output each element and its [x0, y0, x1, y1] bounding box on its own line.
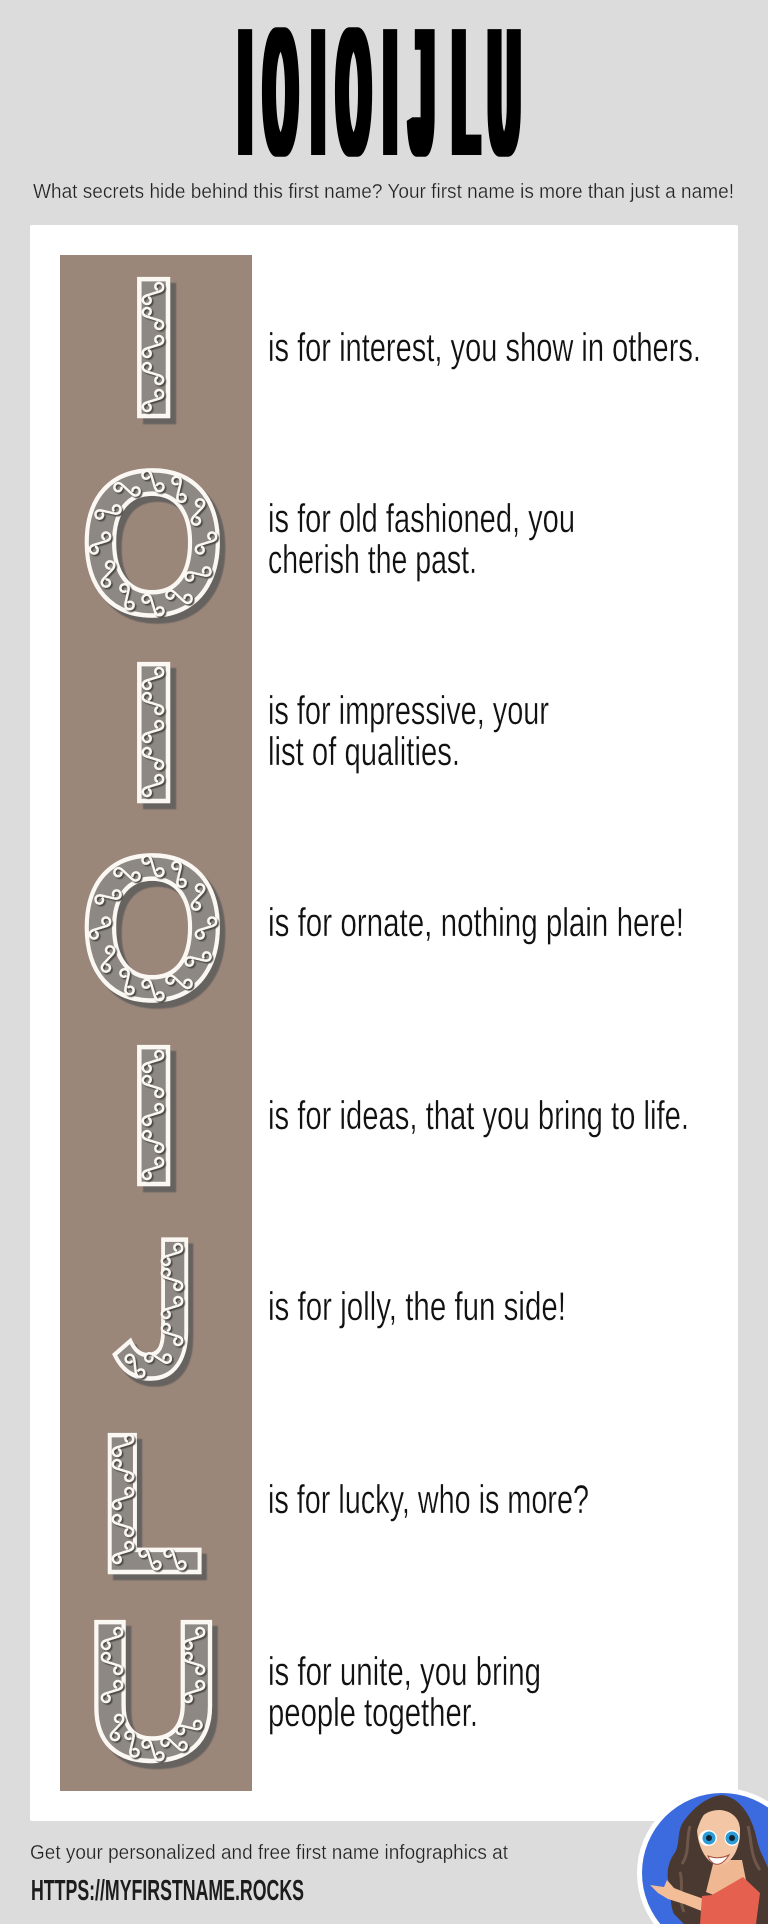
decorative letter I: I [126, 622, 181, 844]
text: L meaning: is for lucky, who is more? [268, 1478, 589, 1522]
hair [668, 1795, 768, 1924]
footer prompt text: Get your personalized and free first name infographics at [30, 1842, 508, 1864]
shirt [700, 1877, 760, 1924]
hair highlights [680, 1826, 760, 1912]
eye right [724, 1830, 740, 1846]
arm and hand [650, 1880, 704, 1912]
text: O meaning: cherish the past. [268, 538, 477, 582]
text: O meaning [268, 497, 575, 582]
icon: woman avatar [637, 1788, 768, 1924]
text: O meaning: is for old fashioned, you [268, 497, 575, 541]
text: U meaning [268, 1650, 541, 1735]
footer url: HTTPS://MYFIRSTNAME.ROCKS [31, 1875, 304, 1907]
text: U meaning: is for unite, you bring [268, 1650, 541, 1694]
text: I meaning [268, 689, 549, 774]
neck [706, 1860, 746, 1896]
eye left [699, 1830, 717, 1846]
parted bangs [697, 1814, 740, 1831]
decorative letter L: L [98, 1392, 205, 1614]
panel: white card [30, 225, 738, 1821]
decorative letter I: I [126, 237, 181, 459]
panel: letter column [60, 237, 252, 1802]
decorative letter O: O [79, 813, 226, 1042]
decorative letter I: I [126, 1005, 181, 1227]
text: U meaning: people together. [268, 1691, 478, 1735]
smile [708, 1855, 729, 1864]
decorative letter O: O [79, 428, 226, 657]
text: J meaning: is for jolly, the fun side! [268, 1285, 566, 1329]
text: I meaning: is for impressive, your [268, 689, 549, 733]
decorative letter U: U [85, 1580, 222, 1802]
face [697, 1810, 740, 1865]
subtitle: What secrets hide behind this first name? Your first name is more than just a name! [33, 181, 734, 203]
decorative letter J: J [111, 1164, 200, 1430]
text: I meaning: list of qualities. [268, 730, 460, 774]
